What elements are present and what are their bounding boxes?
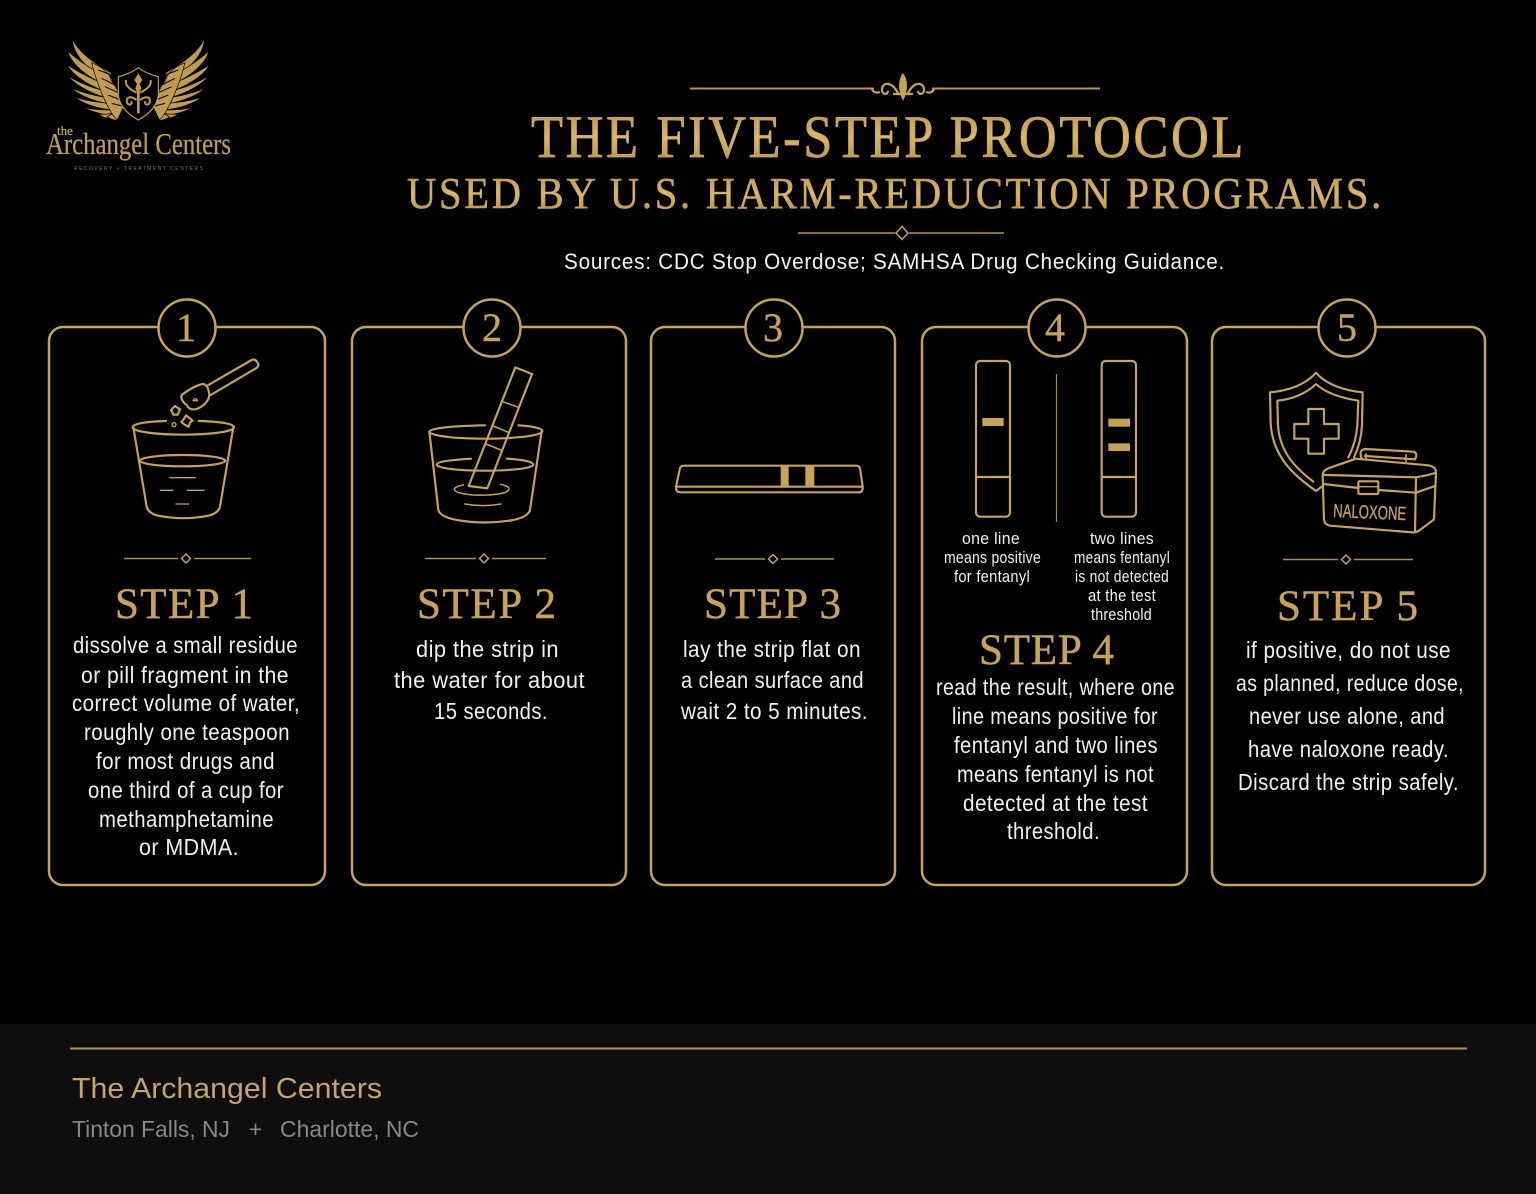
body text: as planned, reduce dose,: [1236, 670, 1464, 696]
body text: correct volume of water,: [72, 690, 300, 716]
footer locations: +: [249, 1116, 262, 1142]
icon: strip dipped in glass: [429, 367, 542, 522]
number badge 1: [158, 300, 216, 356]
footer: [0, 1024, 1536, 1194]
body text: [394, 636, 585, 724]
body text: means fentanyl is not: [957, 761, 1154, 787]
caption: two lines: is not detected: [1075, 568, 1169, 586]
icon: one-line test strip: [976, 361, 1010, 517]
icon: winged shield: [67, 39, 209, 121]
heading: STEP 2: [417, 581, 556, 628]
number badge 4: 4: [1045, 305, 1065, 350]
body text: wait 2 to 5 minutes.: [680, 698, 868, 724]
panel: step 3: [651, 300, 895, 885]
heading: STEP 5: [1277, 583, 1418, 630]
body text: one third of a cup for: [88, 777, 284, 803]
body text: line means positive for: [952, 703, 1158, 729]
logo tagline: RECOVERY + TREATMENT CENTERS: [74, 166, 204, 172]
body text: methamphetamine: [99, 806, 274, 832]
body text: dissolve a small residue: [73, 632, 298, 658]
divider between results: [1056, 374, 1058, 522]
body text: read the result, where one: [936, 674, 1175, 700]
caption: two lines: at the test: [1088, 587, 1156, 605]
footer organisation name: The Archangel Centers: [72, 1073, 382, 1105]
logo: The Archangel Centers: [46, 39, 231, 172]
label: naloxone: NALOXONE: [1333, 501, 1407, 525]
title divider: [798, 226, 1004, 240]
icon: strip lying flat: [676, 466, 863, 492]
body text: lay the strip flat on: [683, 636, 861, 662]
divider: [124, 554, 251, 563]
icon: two-line test strip: [1102, 361, 1136, 517]
caption: two lines: two lines: [1090, 530, 1154, 548]
body text: or MDMA.: [139, 834, 239, 860]
number badge 2: 2: [482, 305, 502, 350]
body text: Discard the strip safely.: [1238, 769, 1459, 795]
logo wordmark: the: [57, 123, 73, 138]
footer locations: [72, 1116, 419, 1142]
logo wordmark: Archangel Centers: [46, 126, 231, 161]
body text: [680, 636, 868, 724]
body text: if positive, do not use: [1246, 637, 1451, 663]
body text: dip the strip in: [416, 636, 559, 662]
body text: have naloxone ready.: [1248, 736, 1449, 762]
body text: never use alone, and: [1249, 703, 1445, 729]
body text: 15 seconds.: [434, 698, 548, 724]
divider: [425, 554, 546, 563]
subtitle: USED BY U.S. HARM-REDUCTION PROGRAMS.: [407, 169, 1384, 218]
title: THE FIVE-STEP PROTOCOL: [531, 104, 1246, 170]
panel: step 1: [49, 300, 325, 885]
body text: [936, 674, 1175, 844]
caption: one line: for fentanyl: [954, 568, 1030, 586]
divider: [1283, 555, 1413, 564]
number badge 2: [464, 300, 520, 356]
caption: two lines: means fentanyl: [1074, 549, 1170, 567]
body text: [1236, 637, 1464, 795]
footer locations: Tinton Falls, NJ: [72, 1116, 230, 1142]
divider: [715, 554, 834, 564]
icon: shield and naloxone kit: [1270, 373, 1436, 532]
icon: scoop over glass of water: [133, 360, 258, 518]
caption: two lines: [1074, 530, 1170, 624]
body text: roughly one teaspoon: [84, 719, 290, 745]
caption: one line: [944, 530, 1041, 586]
caption: one line: means positive: [944, 549, 1041, 567]
body text: fentanyl and two lines: [954, 732, 1158, 758]
number badge 4: [1028, 300, 1086, 356]
body text: [72, 632, 300, 860]
number badge 5: [1318, 300, 1376, 356]
number badge 5: 5: [1337, 305, 1357, 350]
number badge 3: 3: [763, 305, 783, 350]
heading: STEP 3: [704, 581, 841, 628]
body text: the water for about: [394, 667, 585, 693]
body text: or pill fragment in the: [81, 662, 289, 688]
body text: detected at the test: [963, 790, 1148, 816]
number badge 1: 1: [176, 305, 196, 350]
panel: step 4: [922, 300, 1187, 885]
sources line: Sources: CDC Stop Overdose; SAMHSA Drug Checking Guidance.: [564, 249, 1225, 274]
heading: STEP 4: [979, 627, 1114, 674]
footer locations: Charlotte, NC: [280, 1116, 419, 1142]
top ornament: [690, 73, 1100, 101]
panel: step 5: [1212, 300, 1485, 885]
body text: a clean surface and: [681, 667, 864, 693]
number badge 3: [746, 300, 802, 356]
body text: for most drugs and: [96, 748, 275, 774]
caption: one line: one line: [962, 530, 1020, 548]
panel: step 2: [352, 300, 626, 885]
caption: two lines: threshold: [1091, 606, 1152, 624]
body text: threshold.: [1007, 818, 1100, 844]
heading: STEP 1: [115, 581, 253, 628]
